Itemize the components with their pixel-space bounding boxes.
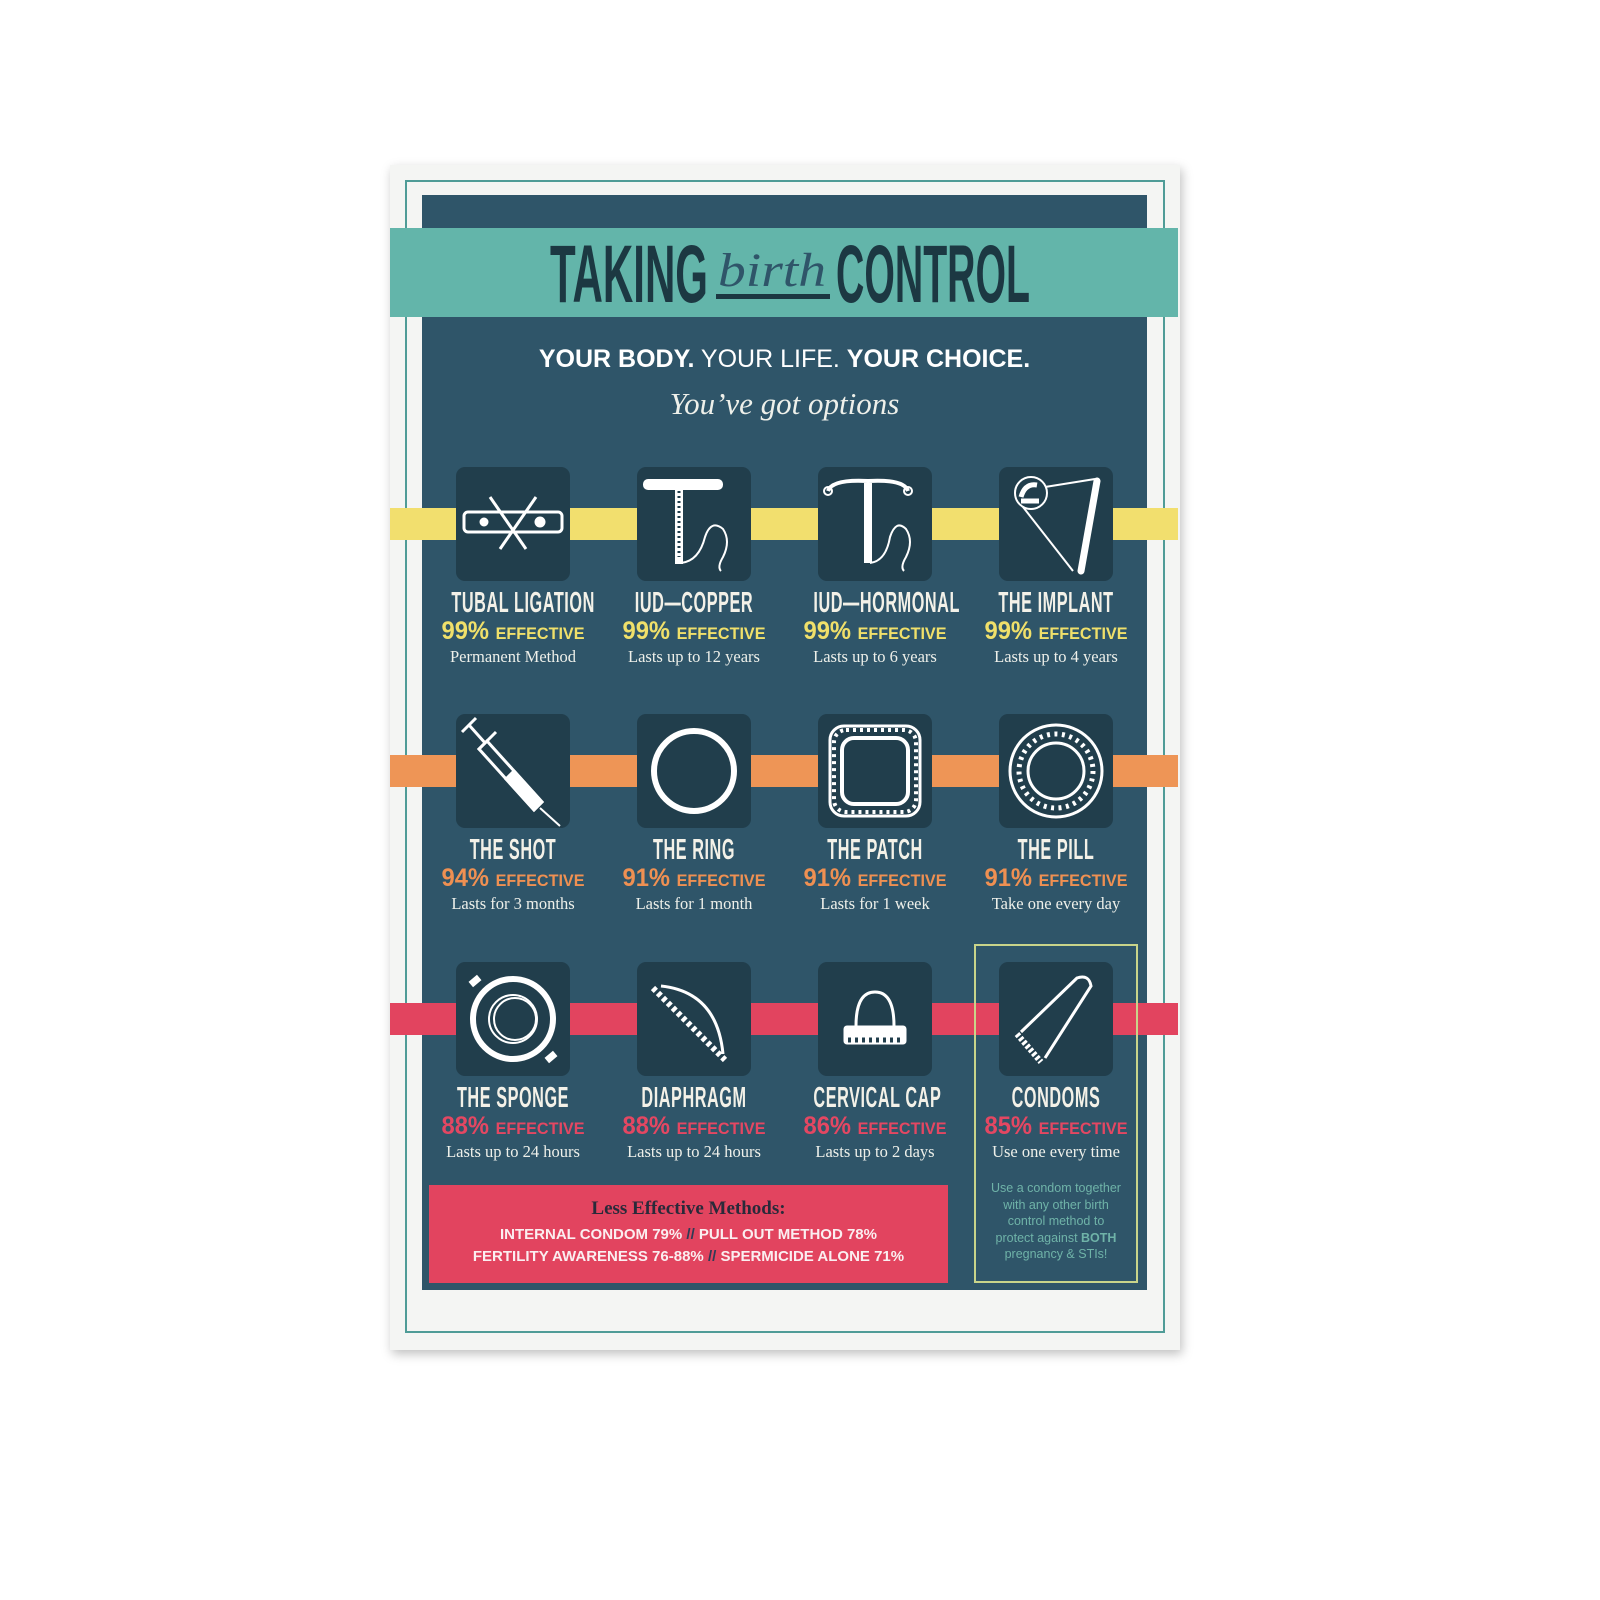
dark panel	[422, 195, 1147, 1290]
cell: implant: 99% EFFECTIVE	[985, 617, 1127, 645]
cell: implant: THE IMPLANT	[998, 587, 1114, 619]
cell: diaphragm: Lasts up to 24 hours	[627, 1142, 761, 1161]
list: INTERNAL CONDOM 79% // PULL OUT METHOD 78%	[500, 1226, 877, 1243]
stripe: orange	[390, 755, 1178, 787]
cell: tubal ligation: 99% EFFECTIVE	[442, 617, 584, 645]
icon: hormonal iud	[818, 467, 932, 581]
cell: iud copper: 99% EFFECTIVE	[623, 617, 765, 645]
title: birth	[718, 244, 826, 297]
cell: sponge: THE SPONGE	[457, 1082, 569, 1114]
icon: sponge	[456, 962, 570, 1076]
condom highlight box	[974, 944, 1138, 1283]
cell: cervical cap: Lasts up to 2 days	[815, 1142, 935, 1161]
cell: ring	[623, 714, 765, 913]
icon: patch	[818, 714, 932, 828]
cell: pill: 91% EFFECTIVE	[985, 864, 1127, 892]
stripe: red	[390, 1003, 1178, 1035]
cell: condoms	[985, 962, 1127, 1161]
cell: sponge: 88% EFFECTIVE	[442, 1112, 584, 1140]
cell: patch: Lasts for 1 week	[820, 894, 930, 913]
cell: diaphragm: 88% EFFECTIVE	[623, 1112, 765, 1140]
cell: pill	[985, 714, 1127, 913]
cell: shot	[442, 714, 584, 913]
icon: pill pack	[999, 714, 1113, 828]
stripe: yellow	[390, 508, 1178, 540]
icon: diaphragm	[637, 962, 751, 1076]
cell: patch: 91% EFFECTIVE	[804, 864, 946, 892]
cell: condoms: CONDOMS	[1012, 1082, 1100, 1114]
cell: cervical cap: 86% EFFECTIVE	[804, 1112, 946, 1140]
tagline: YOUR BODY. YOUR LIFE. YOUR CHOICE.	[539, 345, 1030, 373]
cell: implant: Lasts up to 4 years	[994, 647, 1118, 666]
cell: diaphragm	[623, 962, 765, 1161]
cell: iud copper: Lasts up to 12 years	[628, 647, 760, 666]
icon: tubal ligation	[456, 467, 570, 581]
icon: ring	[637, 714, 751, 828]
icon: syringe	[456, 714, 570, 828]
cell: ring: THE RING	[653, 834, 735, 866]
cell: shot: 94% EFFECTIVE	[442, 864, 584, 892]
cell: pill: THE PILL	[1018, 834, 1094, 866]
subtitle: You’ve got options	[670, 386, 899, 421]
heading: Less Effective Methods:	[591, 1198, 786, 1219]
cell: shot: Lasts for 3 months	[451, 894, 575, 913]
cell: cervical cap	[804, 962, 946, 1161]
list: FERTILITY AWARENESS 76-88% // SPERMICIDE ALONE 71%	[473, 1248, 904, 1265]
cell: ring: Lasts for 1 month	[636, 894, 752, 913]
icon: cervical cap	[818, 962, 932, 1076]
inner frame line	[405, 180, 1165, 1333]
cell: condoms: 85% EFFECTIVE	[985, 1112, 1127, 1140]
cell: implant	[985, 467, 1127, 666]
cell: sponge	[442, 962, 584, 1161]
cell: cervical cap: CERVICAL CAP	[813, 1082, 941, 1114]
title band	[390, 228, 1178, 317]
cell: tubal ligation	[442, 467, 595, 666]
cell: condoms: Use one every time	[992, 1142, 1120, 1161]
cell: patch	[804, 714, 946, 913]
cell: diaphragm: DIAPHRAGM	[641, 1082, 747, 1114]
cell: iud hormonal: Lasts up to 6 years	[813, 647, 937, 666]
cell: iud hormonal: 99% EFFECTIVE	[804, 617, 946, 645]
icon: condom	[999, 962, 1113, 1076]
cell: sponge: Lasts up to 24 hours	[446, 1142, 580, 1161]
cell: iud hormonal	[804, 467, 960, 666]
icon: implant	[999, 467, 1113, 581]
cell: iud copper: IUD—COPPER	[635, 587, 753, 619]
cell: pill: Take one every day	[992, 894, 1120, 913]
cell: iud hormonal: IUD—HORMONAL	[813, 587, 960, 619]
less effective methods box	[429, 1185, 948, 1283]
list	[473, 1226, 904, 1265]
poster sheet	[390, 165, 1180, 1350]
cell: tubal ligation: TUBAL LIGATION	[451, 587, 595, 619]
cell: shot: THE SHOT	[470, 834, 556, 866]
icon: copper iud	[637, 467, 751, 581]
title	[550, 229, 1030, 317]
condom note: Use a condom together with any other birth control method to protect against BOTH pregnancy & STIs!	[991, 1181, 1121, 1261]
cell: patch: THE PATCH	[827, 834, 923, 866]
cell: iud copper	[623, 467, 765, 666]
cell: ring: 91% EFFECTIVE	[623, 864, 765, 892]
cell: tubal ligation: Permanent Method	[450, 647, 576, 666]
